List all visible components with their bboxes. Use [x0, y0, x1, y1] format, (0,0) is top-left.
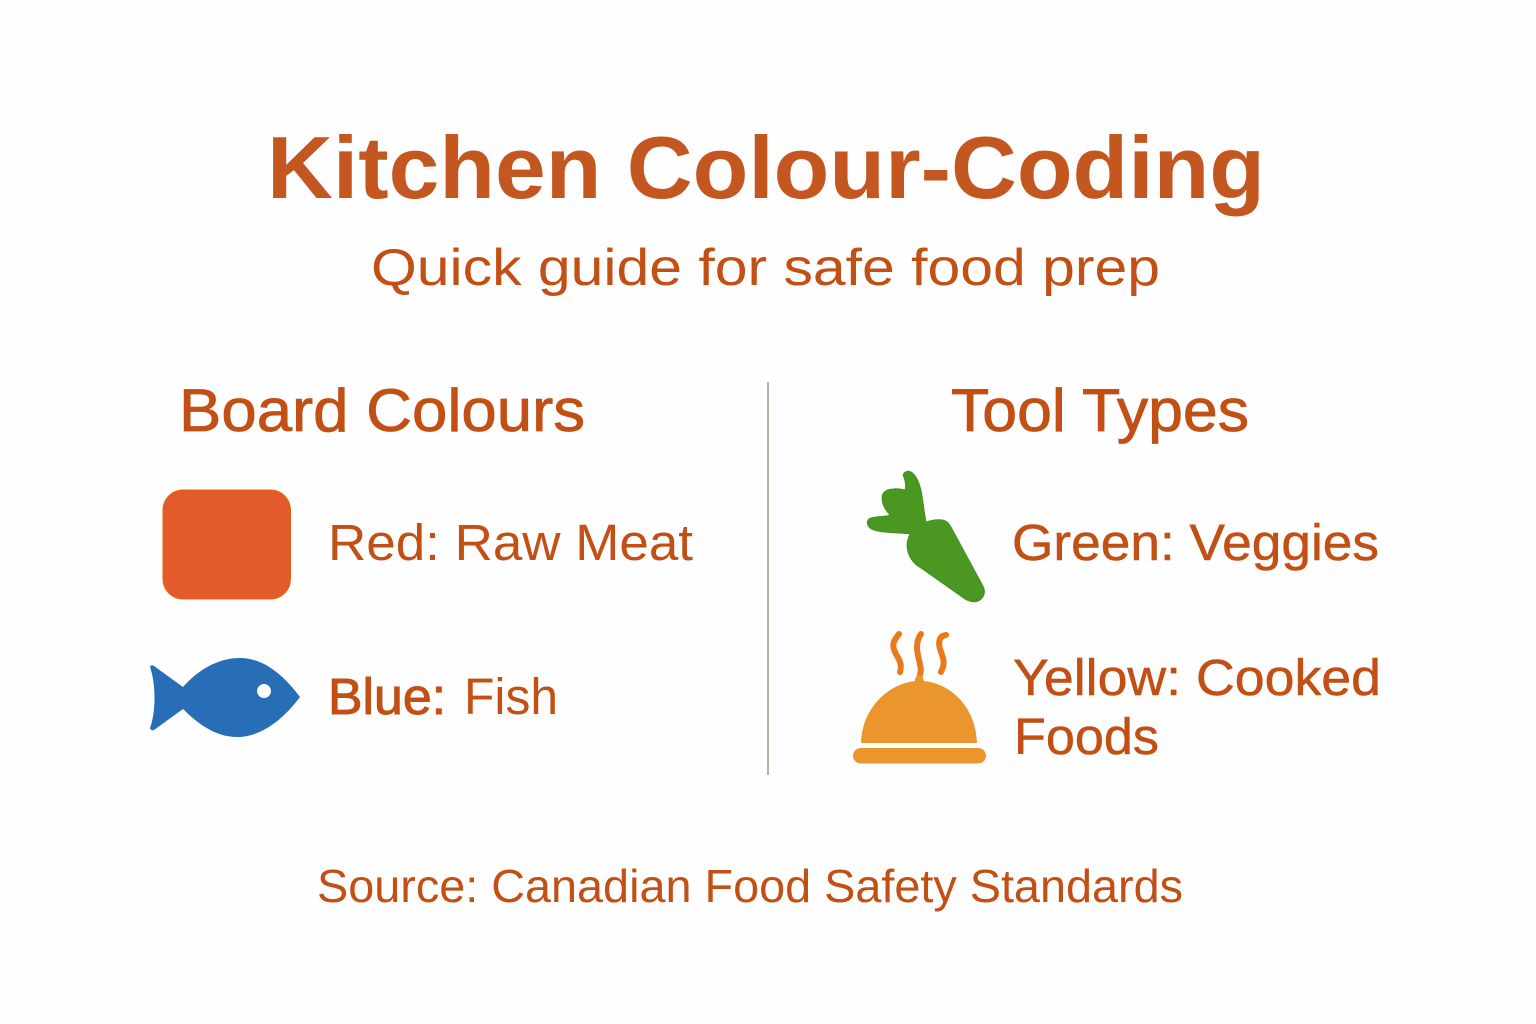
divider [767, 382, 769, 775]
label: blue fish: Blue: [328, 668, 446, 725]
icon: red board [163, 490, 290, 599]
panel: tool types [853, 377, 1381, 765]
icon: steaming cloche [853, 634, 986, 764]
label: blue fish: Fish [464, 668, 558, 725]
dome [861, 675, 977, 743]
icon: blue fish [150, 658, 300, 737]
label: red raw meat: Red: Raw Meat [328, 514, 693, 571]
title: Kitchen Colour-Coding [267, 118, 1265, 217]
heading: board colours: Board Colours [179, 377, 585, 444]
panel: board colours [150, 377, 693, 737]
label: yellow cooked foods: Yellow: Cooked [1013, 649, 1381, 706]
label: green veggies: Green: Veggies [1012, 514, 1379, 571]
source note: Source: Canadian Food Safety Standards [317, 860, 1183, 912]
heading: tool types: Tool Types [951, 377, 1249, 444]
subtitle: Quick guide for safe food prep [371, 239, 1160, 297]
label: yellow cooked foods: Foods [1014, 708, 1159, 765]
steam [893, 634, 946, 680]
icon: green carrot [867, 471, 984, 602]
label: blue fish [328, 668, 558, 725]
tray [853, 748, 986, 764]
label: yellow cooked foods [1013, 649, 1381, 765]
